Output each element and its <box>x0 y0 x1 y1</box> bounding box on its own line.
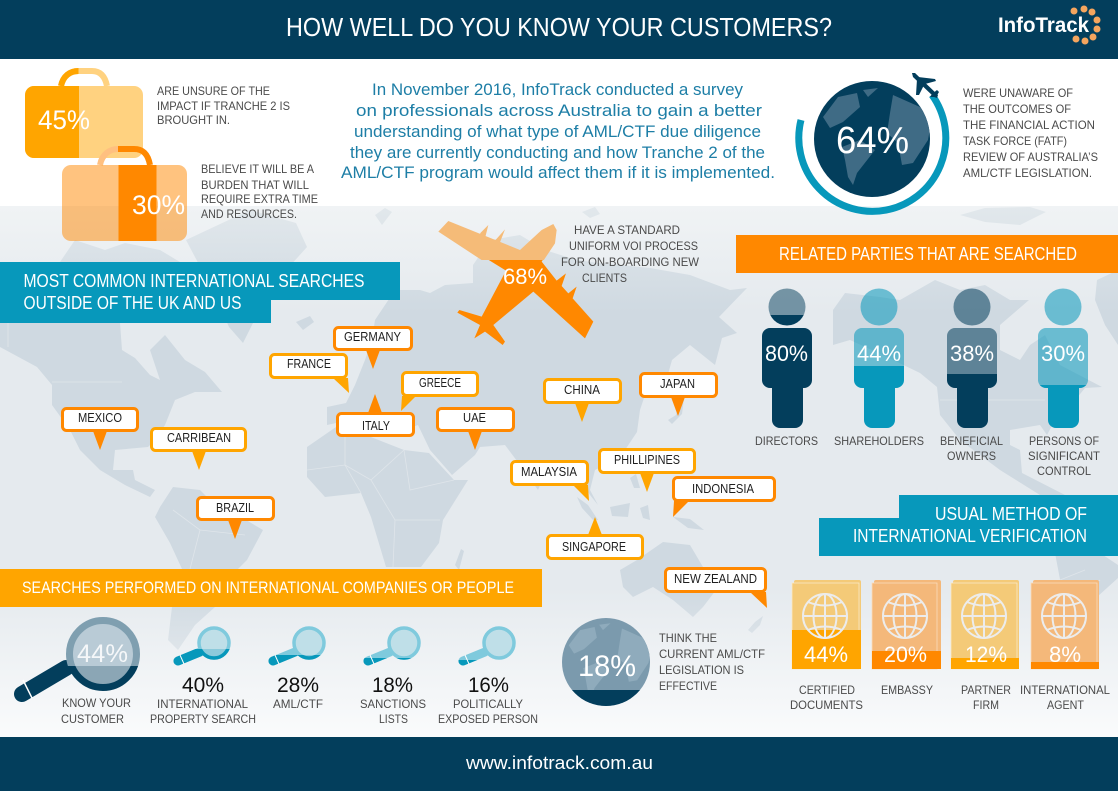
text: unaware: WERE UNAWARE OF <box>963 86 1073 100</box>
text: burden: BELIEVE IT WILL BE A <box>201 162 314 176</box>
magnifier: politically exposed person 16%: POLITICALLY <box>453 697 523 711</box>
stat: 30% suitcase <box>62 149 318 241</box>
stat: 30% suitcase: 30% <box>132 190 185 220</box>
stat: 64% globe: 64% <box>836 120 909 162</box>
person: significant control 30%: SIGNIFICANT <box>1028 449 1101 463</box>
magnifier: politically exposed person 16% <box>438 628 538 726</box>
person: significant control 30%: PERSONS OF <box>1029 434 1099 448</box>
banner: usual method <box>819 495 1118 556</box>
text: burden: AND RESOURCES. <box>201 207 297 221</box>
text: unsure: ARE UNSURE OF THE <box>157 84 270 98</box>
map pin: Japan: JAPAN <box>660 377 695 391</box>
magnifier: sanctions lists 18%: SANCTIONS <box>360 697 426 711</box>
magnifier: know your customer 44%: 44% <box>77 640 128 668</box>
logo: InfoTrack <box>998 6 1100 44</box>
book: certified documents 44%: CERTIFIED <box>799 683 855 697</box>
text: unaware: THE FINANCIAL ACTION <box>963 118 1095 132</box>
map pin: Malaysia: MALAYSIA <box>521 465 578 479</box>
website: www.infotrack.com.au <box>465 753 653 773</box>
magnifier: international property search 40%: PROPERTY SEARCH <box>150 712 256 726</box>
book: partner firm 12%: 12% <box>965 642 1007 667</box>
person: directors 80% <box>755 288 818 448</box>
person: beneficial owners 38% <box>940 288 1003 463</box>
title: HOW WELL DO YOU KNOW YOUR CUSTOMERS? <box>286 12 832 42</box>
book: international agent 8% <box>1020 580 1110 712</box>
map pin: Singapore: SINGAPORE <box>562 540 626 554</box>
map pin: Phillipines: PHILLIPINES <box>614 453 680 467</box>
magnifier: international property search 40%: 40% <box>182 674 224 697</box>
book: certified documents 44% <box>790 580 863 712</box>
text: unsure <box>157 84 290 127</box>
magnifier: politically exposed person 16%: 16% <box>468 674 509 697</box>
stat: 45% suitcase <box>25 71 290 158</box>
map pin: Germany <box>334 328 412 369</box>
person: beneficial owners 38%: OWNERS <box>947 449 996 463</box>
book: international agent 8%: INTERNATIONAL <box>1020 683 1110 697</box>
banner: usual method: INTERNATIONAL VERIFICATION <box>853 526 1087 546</box>
map background <box>0 206 1118 737</box>
text: legislation effective: THINK THE <box>659 631 717 645</box>
magnifier: AML/CTF 28% <box>273 628 324 711</box>
text: VOI process: CLIENTS <box>582 271 627 285</box>
magnifier: sanctions lists 18% <box>360 628 426 726</box>
map pin: New Zealand: NEW ZEALAND <box>674 572 757 586</box>
stat: 18% globe <box>560 618 765 710</box>
map pin: Italy: ITALY <box>362 419 391 433</box>
banner: searches performed: SEARCHES PERFORMED ON INTERNATIONAL COMPANIES OR PEOPLE <box>22 578 514 597</box>
text: unsure: IMPACT IF TRANCHE 2 IS <box>157 99 290 113</box>
map pin: Carribean: CARRIBEAN <box>167 431 231 445</box>
intro text: AML/CTF program would affect them if it is implemented. <box>341 164 775 182</box>
banner: searches performed <box>0 569 542 607</box>
text: burden: BURDEN THAT WILL <box>201 178 309 192</box>
person: directors 80%: DIRECTORS <box>755 434 818 448</box>
map pin: Mexico: MEXICO <box>78 411 122 425</box>
text: VOI process: FOR ON-BOARDING NEW <box>561 255 700 269</box>
magnifier: international property search 40% <box>150 628 256 726</box>
text: burden: REQUIRE EXTRA TIME <box>201 192 318 206</box>
text: unaware: AML/CTF LEGISLATION. <box>963 166 1092 180</box>
map pin: Singapore <box>548 517 642 558</box>
person: shareholders 44%: SHAREHOLDERS <box>834 434 924 448</box>
map pin: Malaysia <box>512 462 589 501</box>
logo: InfoTrack: InfoTrack <box>998 14 1089 37</box>
book: embassy 20%: EMBASSY <box>881 683 933 697</box>
stat: 18% globe: 18% <box>578 650 636 683</box>
book: partner firm 12% <box>951 580 1019 712</box>
magnifier: international property search 40%: INTERNATIONAL <box>157 697 248 711</box>
map pin: Greece <box>401 372 478 411</box>
magnifier: politically exposed person 16%: EXPOSED PERSON <box>438 712 538 726</box>
text: legislation effective <box>659 631 765 693</box>
footer bar <box>0 737 1118 791</box>
map pin: Mexico <box>62 408 138 450</box>
map pin: Italy <box>338 394 414 436</box>
text: legislation effective: EFFECTIVE <box>659 679 717 693</box>
book: embassy 20%: 20% <box>884 642 927 667</box>
magnifier: AML/CTF 28%: 28% <box>277 674 319 697</box>
intro text: understanding of what type of AML/CTF due diligence <box>354 123 761 141</box>
person: shareholders 44% <box>834 288 924 448</box>
text: VOI process <box>561 223 700 285</box>
map pin: New Zealand <box>666 568 767 608</box>
person: significant control 30%: CONTROL <box>1037 464 1091 478</box>
banner: most common international searches: MOST COMMON INTERNATIONAL SEARCHES <box>24 271 364 291</box>
text: legislation effective: CURRENT AML/CTF <box>659 647 765 661</box>
person: beneficial owners 38%: BENEFICIAL <box>940 434 1003 448</box>
text: burden <box>201 162 318 221</box>
person: significant control 30%: 30% <box>1041 341 1085 366</box>
intro text: they are currently conducting and how Tranche 2 of the <box>350 144 765 162</box>
text: legislation effective: LEGISLATION IS <box>659 663 744 677</box>
intro text: In November 2016, InfoTrack conducted a survey <box>372 81 744 99</box>
book: international agent 8%: 8% <box>1049 642 1081 667</box>
magnifier: sanctions lists 18%: LISTS <box>379 712 408 726</box>
map pin: Brazil: BRAZIL <box>216 501 254 515</box>
book: certified documents 44%: DOCUMENTS <box>790 698 863 712</box>
stat: 68% plane <box>438 221 700 345</box>
icon: small plane <box>912 73 939 98</box>
text: VOI process: UNIFORM VOI PROCESS <box>569 239 698 253</box>
person: beneficial owners 38%: 38% <box>950 341 994 366</box>
text: unaware: THE OUTCOMES OF <box>963 102 1071 116</box>
map pin: Brazil <box>198 498 274 539</box>
map pin: Japan <box>640 374 716 416</box>
magnifier: AML/CTF 28%: AML/CTF <box>273 697 323 711</box>
map pin: Carribean <box>152 428 246 470</box>
map pin: Greece: GREECE <box>419 376 461 390</box>
map pin: Germany: GERMANY <box>344 330 402 344</box>
intro text: on professionals across Australia to gain a better <box>356 102 763 120</box>
person: shareholders 44%: 44% <box>857 341 901 366</box>
stat: 45% suitcase: 45% <box>38 105 90 135</box>
magnifier: know your customer 44%: CUSTOMER <box>61 712 124 726</box>
stat: 64% globe <box>799 73 1098 211</box>
banner: related parties <box>736 235 1118 273</box>
book: embassy 20% <box>872 580 941 697</box>
book: international agent 8%: AGENT <box>1047 698 1085 712</box>
magnifier: know your customer 44%: KNOW YOUR <box>62 696 131 710</box>
book: partner firm 12%: FIRM <box>973 698 999 712</box>
magnifier: know your customer 44% <box>22 620 136 726</box>
map pin: UAE: UAE <box>463 411 486 425</box>
magnifier: sanctions lists 18%: 18% <box>372 674 413 697</box>
text: unaware: REVIEW OF AUSTRALIA’S <box>963 150 1098 164</box>
text: VOI process: HAVE A STANDARD <box>574 223 680 237</box>
book: partner firm 12%: PARTNER <box>961 683 1011 697</box>
stat: 68% plane: 68% <box>503 264 547 289</box>
map pin: China: CHINA <box>564 383 601 397</box>
intro text <box>341 81 775 182</box>
map pin: Indonesia: INDONESIA <box>692 482 755 496</box>
text: unsure: BROUGHT IN. <box>157 113 230 127</box>
person: directors 80%: 80% <box>765 341 808 366</box>
map pin: UAE <box>438 408 514 450</box>
map pin: France: FRANCE <box>287 357 331 371</box>
map pin: China <box>544 380 620 422</box>
header bar <box>0 0 1118 59</box>
book: certified documents 44%: 44% <box>804 642 848 667</box>
map pin: France <box>270 354 349 393</box>
map pin: Phillipines <box>600 450 694 492</box>
text: unaware: TASK FORCE (FATF) <box>963 134 1067 148</box>
banner: most common international searches <box>0 262 400 323</box>
text: unaware <box>963 86 1098 180</box>
person: significant control 30% <box>1028 288 1101 478</box>
map pin: Indonesia <box>673 478 774 517</box>
banner: usual method: USUAL METHOD OF <box>935 504 1087 524</box>
banner: most common international searches: OUTSIDE OF THE UK AND US <box>24 293 242 313</box>
